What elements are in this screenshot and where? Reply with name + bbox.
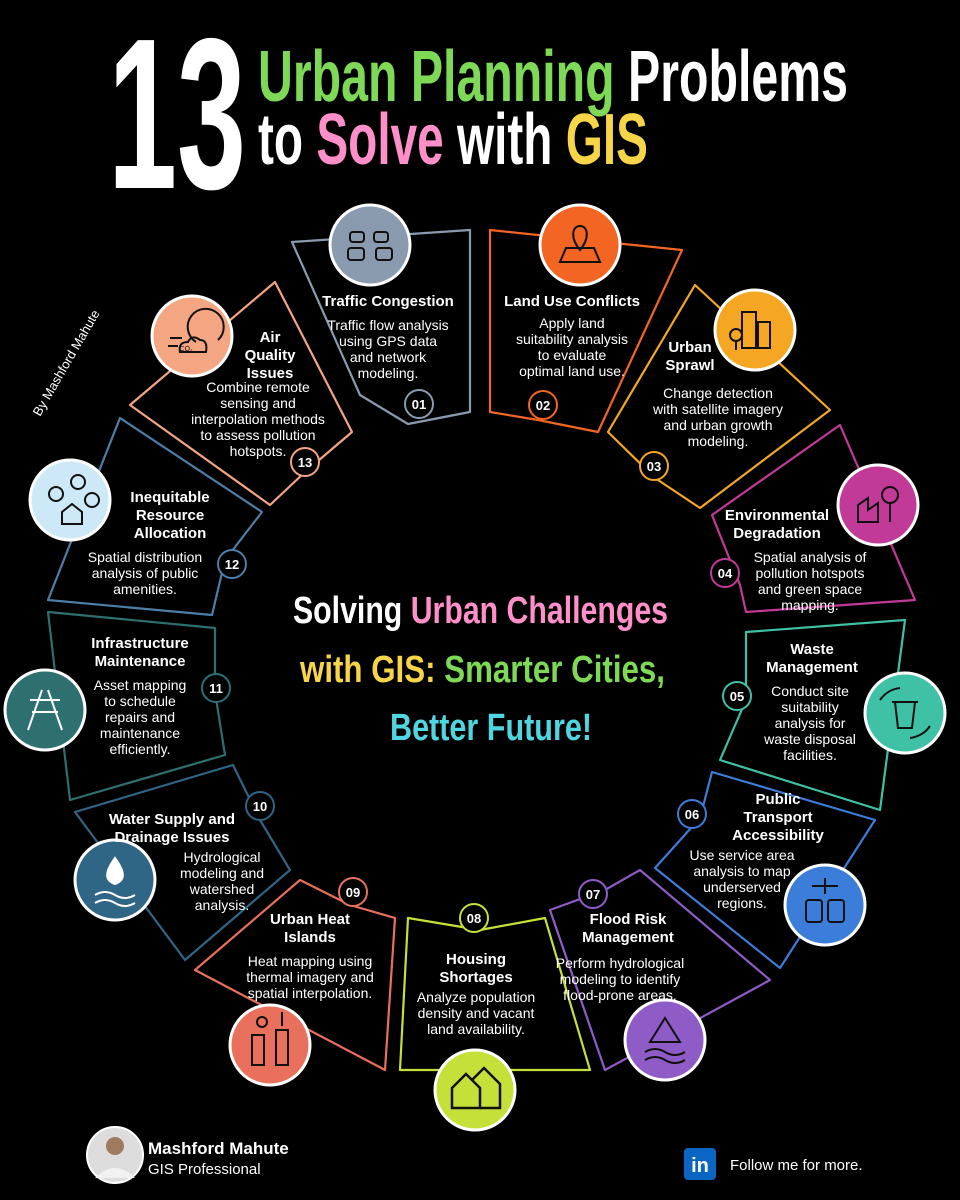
panel 07: flood-prone areas. <box>563 987 677 1003</box>
panel 03: Urban <box>668 339 712 356</box>
panel 06: regions. <box>717 895 767 911</box>
panel 11: repairs and <box>105 709 175 725</box>
panel 12: Allocation <box>134 525 206 542</box>
panel 02: 02 <box>536 398 550 413</box>
panel 13: Quality <box>245 347 296 364</box>
panel 11: maintenance <box>100 725 180 741</box>
title <box>108 0 848 234</box>
panel 08: 08 <box>467 911 481 926</box>
panel 13: Combine remote <box>206 379 310 395</box>
panel 04: mapping. <box>781 597 839 613</box>
panel 13: CO₂ <box>179 346 193 353</box>
footer: author: Mashford Mahute <box>148 1139 289 1158</box>
footer: linkedin <box>684 1148 863 1180</box>
center text <box>293 590 668 749</box>
panel 07: modeling to identify <box>560 971 680 987</box>
panel 13 <box>152 296 325 476</box>
panel 13: Issues <box>247 365 293 382</box>
panel 02 <box>504 205 640 419</box>
panel 06: Transport <box>743 809 813 826</box>
center text: with GIS: Smarter Cities, <box>299 649 665 691</box>
panel 10: 10 <box>253 799 267 814</box>
panel 03: Change detection <box>663 385 773 401</box>
panel 10: Drainage Issues <box>114 829 230 846</box>
panel 01: Traffic Congestion <box>322 293 454 310</box>
footer: author: GIS Professional <box>148 1161 261 1178</box>
footer: author <box>87 1127 289 1183</box>
panel 06: Public <box>755 791 801 808</box>
panel 07 <box>556 880 705 1080</box>
panel 01: modeling. <box>358 365 418 381</box>
footer: linkedin: in <box>691 1155 709 1177</box>
panel 11: 11 <box>209 681 223 696</box>
panel 09: Urban Heat <box>270 911 350 928</box>
panel 03: 03 <box>647 459 661 474</box>
panel 05: suitability <box>781 699 839 715</box>
panel 11: Maintenance <box>95 653 185 670</box>
panel 03: with satellite imagery <box>652 401 783 417</box>
panel 10: Hydrological <box>183 849 261 865</box>
panel 09: 09 <box>346 885 360 900</box>
panel 12 <box>30 460 246 597</box>
panel 03: modeling. <box>688 433 748 449</box>
panel 06: Use service area <box>689 847 795 863</box>
panel 12: Inequitable <box>130 489 210 506</box>
panel 08 <box>417 904 535 1130</box>
panel 09: Heat mapping using <box>248 953 372 969</box>
panel 08: Shortages <box>439 969 513 986</box>
panel 02: optimal land use. <box>519 363 625 379</box>
panel 06 <box>678 791 865 945</box>
panel 12: 12 <box>225 557 239 572</box>
panel 01 <box>322 205 454 418</box>
panel 10: analysis. <box>195 897 249 913</box>
panel 01: 01 <box>412 397 426 412</box>
panel 09: Islands <box>284 929 336 946</box>
panel 03: Sprawl <box>665 357 715 374</box>
panel 07: Flood Risk <box>590 911 667 928</box>
panel 11: Asset mapping <box>94 677 186 693</box>
panel 06: underserved <box>703 879 781 895</box>
panel 09 <box>230 878 374 1085</box>
panel 11: Infrastructure <box>91 635 189 652</box>
panel 04: Spatial analysis of <box>754 549 867 565</box>
panel 05: analysis for <box>775 715 846 731</box>
panel 11: to schedule <box>104 693 176 709</box>
panel 05: Conduct site <box>771 683 849 699</box>
panel 08: density and vacant <box>418 1005 534 1021</box>
panel 09: spatial interpolation. <box>248 985 372 1001</box>
panel 02: suitability analysis <box>516 331 628 347</box>
panel 07: Management <box>582 929 674 946</box>
panel 03: and urban growth <box>664 417 772 433</box>
panel 10: watershed <box>189 881 254 897</box>
panel 02: Apply land <box>539 315 605 331</box>
title: 13 <box>108 0 246 234</box>
panel 11 <box>5 635 230 757</box>
panel 11: efficiently. <box>110 741 170 757</box>
panel 06: analysis to map <box>693 863 791 879</box>
panel 12: Resource <box>136 507 204 524</box>
panel 05: facilities. <box>783 747 837 763</box>
panel 10 <box>75 792 274 920</box>
panel 12: amenities. <box>113 581 177 597</box>
panel 02: Land Use Conflicts <box>504 293 640 310</box>
segments ring <box>48 230 915 1070</box>
panel 04: Degradation <box>733 525 821 542</box>
panel 06: Accessibility <box>732 827 825 844</box>
center text: Solving Urban Challenges <box>293 590 668 632</box>
panel 10: modeling and <box>180 865 264 881</box>
panel 07: 07 <box>586 887 600 902</box>
panel 07: Perform hydrological <box>556 955 684 971</box>
panel 03 <box>640 290 795 480</box>
title: Urban Planning Problems <box>258 37 848 117</box>
panel 12: analysis of public <box>92 565 198 581</box>
panel 13: sensing and <box>220 395 296 411</box>
footer: linkedin: Follow me for more. <box>730 1157 863 1174</box>
center text: Better Future! <box>390 707 592 749</box>
panel 05: Waste <box>790 641 834 658</box>
panel 08: Analyze population <box>417 989 535 1005</box>
panel 05: Management <box>766 659 858 676</box>
panel 04: 04 <box>718 566 733 581</box>
panel 04 <box>711 465 918 613</box>
panel 04: and green space <box>758 581 862 597</box>
title: to Solve with GIS <box>258 100 648 180</box>
panel 13: 13 <box>298 455 312 470</box>
panel 04: pollution hotspots <box>756 565 864 581</box>
panel 13: hotspots. <box>230 443 286 459</box>
panel 13: Air <box>260 329 281 346</box>
panel 13: to assess pollution <box>200 427 316 443</box>
panel 05: waste disposal <box>763 731 856 747</box>
panel 09: thermal imagery and <box>246 969 374 985</box>
panel 08: land availability. <box>427 1021 525 1037</box>
panel 13: interpolation methods <box>191 411 325 427</box>
panel 01: and network <box>350 349 427 365</box>
panel 01: using GPS data <box>339 333 437 349</box>
panel 05: 05 <box>730 689 744 704</box>
panel 05 <box>723 641 945 763</box>
panel 10: Water Supply and <box>109 811 235 828</box>
panel 12: Spatial distribution <box>88 549 202 565</box>
panel 04: Environmental <box>725 507 829 524</box>
panel 02: to evaluate <box>538 347 606 363</box>
author credit: By Mashford Mahute <box>30 307 103 418</box>
panel 01: Traffic flow analysis <box>327 317 449 333</box>
panel 06: 06 <box>685 807 699 822</box>
panel 08: Housing <box>446 951 506 968</box>
